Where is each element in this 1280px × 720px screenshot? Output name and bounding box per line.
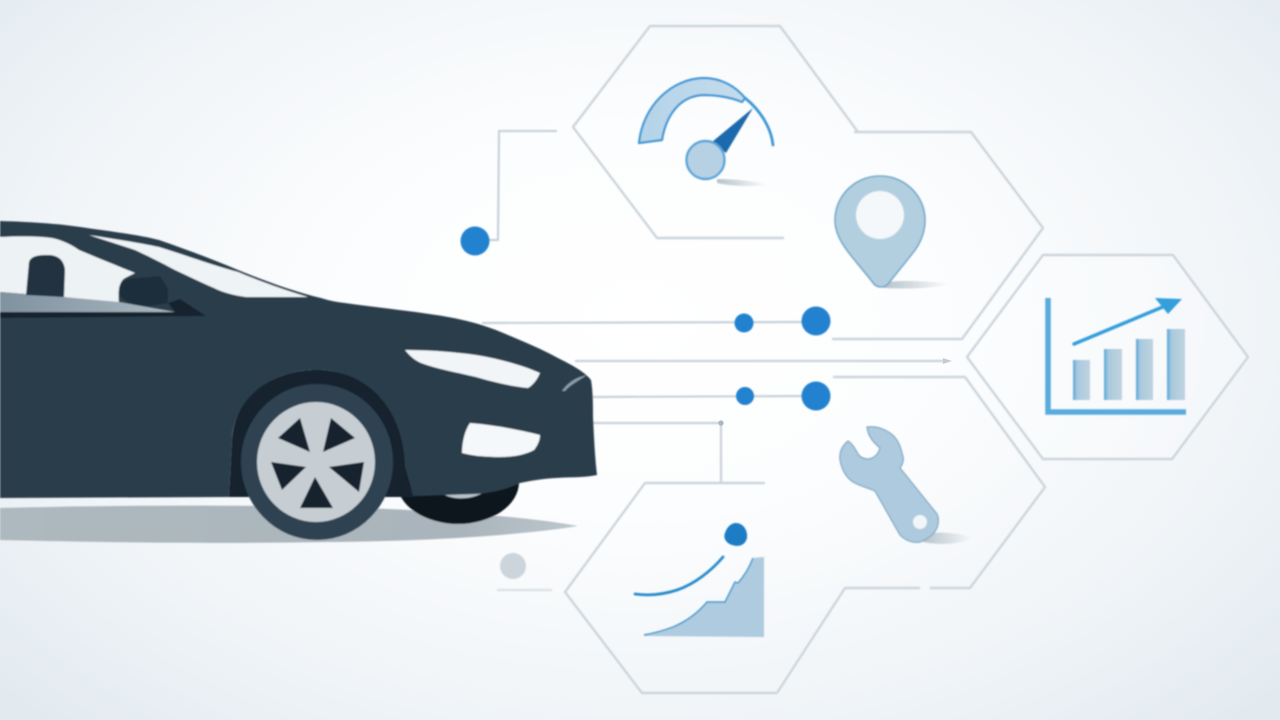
connector lines — [482, 131, 946, 590]
pin body — [835, 176, 925, 287]
far wheel — [397, 440, 519, 524]
connector: lower horizontal — [592, 396, 805, 397]
connector: lower elbow — [592, 423, 721, 483]
pin shadow — [884, 281, 950, 289]
car — [0, 221, 597, 543]
car ground shadow — [0, 506, 578, 543]
wrench body — [840, 427, 938, 542]
hexagon: performance curve — [565, 483, 777, 693]
arrow tip on middle line — [943, 358, 952, 364]
door sill — [0, 292, 175, 315]
front wheel — [241, 384, 393, 540]
connector: upper horizontal — [482, 322, 805, 323]
wrench hole — [913, 515, 927, 529]
curve area — [644, 557, 764, 637]
connector: top left elbow — [485, 131, 557, 240]
rim openings — [271, 418, 364, 508]
chart trend arrow — [1074, 298, 1182, 344]
window base strip — [0, 299, 206, 318]
icon: performance curve — [635, 523, 764, 637]
icon: wrench — [840, 427, 973, 544]
connector: middle arrow line — [575, 360, 946, 362]
wheel arch — [229, 370, 414, 497]
gauge shadow — [717, 179, 768, 186]
curve line — [635, 557, 723, 595]
pin hole — [856, 191, 904, 239]
rim — [257, 402, 375, 522]
icon: speedometer — [639, 78, 773, 186]
dot: lower large — [802, 382, 830, 410]
hexagon: wrench — [777, 377, 1045, 693]
side window — [0, 236, 135, 303]
chart bars — [1073, 329, 1185, 400]
wrench shadow — [923, 533, 973, 544]
dot: grey — [500, 553, 526, 579]
driver seat headrest — [26, 255, 65, 297]
hexagon: bar chart — [967, 255, 1248, 459]
hexagon outlines — [565, 26, 1248, 693]
lower elbow node — [718, 420, 724, 426]
icon: bar chart — [1048, 298, 1186, 412]
curve dot — [724, 523, 747, 546]
dot: upper small — [734, 314, 754, 332]
hexagon: location pin — [832, 132, 1043, 339]
fog light — [462, 423, 540, 457]
curve area edge — [644, 558, 753, 635]
headlight — [405, 350, 540, 388]
chart axes — [1048, 298, 1186, 412]
icon: location pin — [835, 176, 950, 289]
tyre — [241, 384, 393, 540]
hexagon: speedometer — [573, 26, 858, 238]
connector: faint stub by grey dot — [497, 589, 552, 591]
hood crease — [562, 375, 587, 391]
dot: lower small — [736, 387, 754, 405]
blue dots — [460, 226, 830, 410]
dot: upper large — [802, 306, 830, 336]
gauge outer arc — [745, 98, 773, 145]
car body — [0, 221, 597, 498]
dot: top left — [460, 226, 490, 256]
windshield — [89, 235, 308, 297]
side mirror — [119, 276, 168, 306]
gauge hub — [686, 141, 724, 179]
gauge band — [639, 78, 745, 143]
gauge needle — [712, 108, 753, 153]
